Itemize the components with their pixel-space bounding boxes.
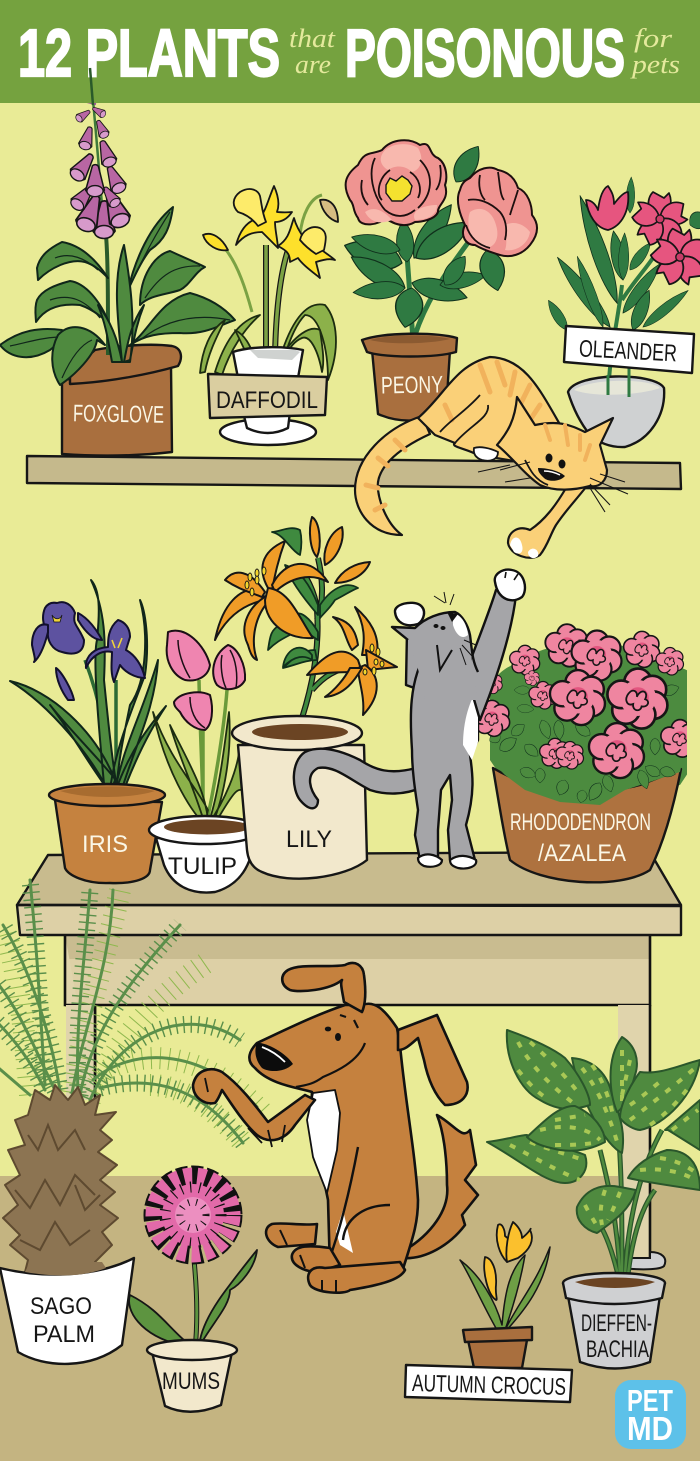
- dieffenbachia pot: BACHIA: [586, 1336, 649, 1363]
- title banner: are: [295, 50, 331, 79]
- plant: daffodil: [200, 186, 338, 445]
- foxglove tip over banner: [90, 68, 93, 105]
- dieffenbachia plant: [487, 1030, 700, 1368]
- plant: rhododendron: [474, 624, 698, 882]
- sago palm pot: [0, 1258, 134, 1364]
- plant: tulip: [149, 631, 261, 893]
- title banner: [0, 0, 700, 103]
- foxglove pot: FOXGLOVE: [73, 400, 164, 429]
- tulip pot: TULIP: [168, 853, 237, 880]
- mums pot: MUMS: [162, 1368, 220, 1395]
- daffodil pot, saucer and label: [208, 347, 327, 445]
- title banner: that: [289, 24, 336, 53]
- oleander pot and label: [564, 326, 694, 447]
- crocus pot and label: AUTUMN CROCUS: [412, 1370, 566, 1401]
- peony blooms: [346, 140, 537, 256]
- plant: lily: [215, 517, 397, 879]
- lower table: [17, 852, 681, 1269]
- upper shelf: [27, 456, 681, 489]
- plant: foxglove: [0, 68, 235, 456]
- title banner: for: [634, 24, 673, 53]
- logo: PetMD: [615, 1380, 686, 1449]
- title banner: 12 PLANTS: [18, 16, 280, 91]
- mums pot: [147, 1340, 237, 1412]
- plant: autumn crocus: [405, 1222, 572, 1402]
- title banner: pets: [630, 50, 680, 79]
- lily pot: LILY: [286, 826, 332, 853]
- peony pot: PEONY: [381, 371, 443, 399]
- plant: iris: [10, 580, 166, 883]
- iris pot: [49, 784, 165, 883]
- orange cat on shelf: [355, 357, 628, 558]
- gray cat: [294, 570, 525, 869]
- sago palm pot: SAGO: [30, 1293, 92, 1320]
- daffodil pot, saucer and label: DAFFODIL: [216, 387, 318, 414]
- logo: PetMD: PET: [627, 1383, 673, 1418]
- plant: peony: [341, 140, 537, 421]
- floor: [0, 1176, 700, 1461]
- plant: sago palm: [0, 880, 262, 1364]
- dieffenbachia pot: DIEFFEN-: [581, 1310, 652, 1337]
- logo: PetMD: MD: [627, 1410, 673, 1447]
- rhododendron pot: /AZALEA: [538, 840, 626, 867]
- foxglove pot: [62, 345, 181, 456]
- lily pot: [232, 716, 367, 879]
- dog: [193, 963, 478, 1293]
- sago palm pot: PALM: [33, 1321, 95, 1348]
- rhododendron pot: [493, 768, 681, 882]
- plant: oleander: [544, 177, 700, 447]
- peony pot: [362, 334, 457, 421]
- crocus pot and label: [405, 1327, 572, 1402]
- tulip pot: [149, 816, 261, 893]
- dieffenbachia pot: [563, 1273, 665, 1368]
- plant: mums: [129, 1176, 257, 1412]
- iris pot: IRIS: [82, 831, 128, 858]
